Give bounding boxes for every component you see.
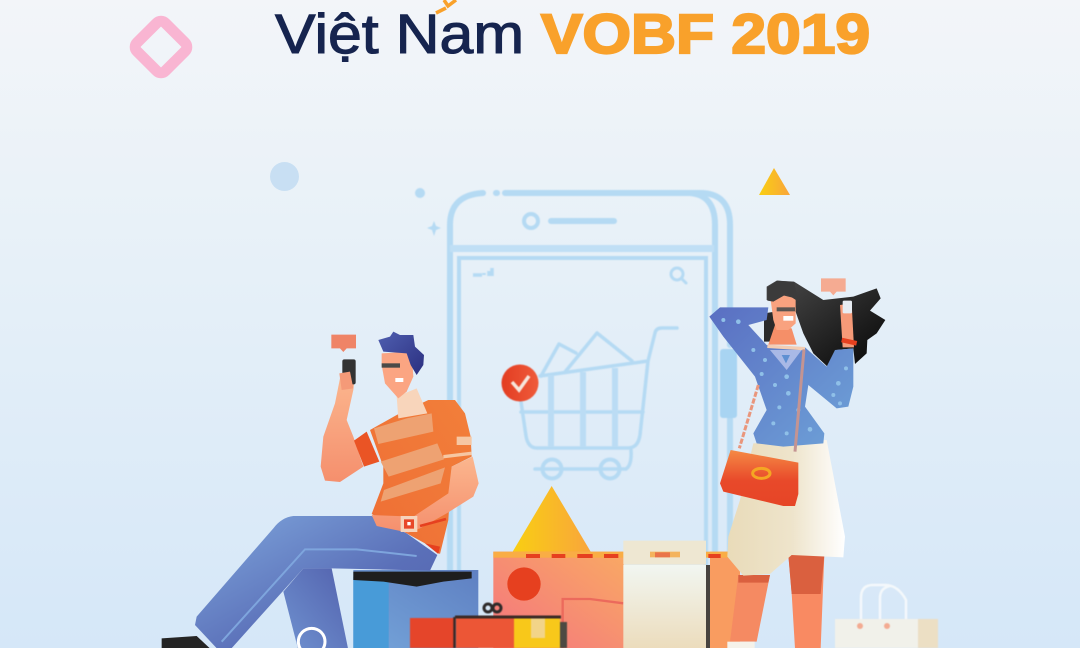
face — [771, 295, 796, 330]
legs — [727, 555, 824, 648]
face — [382, 352, 413, 398]
hand — [339, 372, 353, 390]
shopping bag — [835, 585, 938, 648]
sparkles — [415, 188, 441, 236]
raised arm — [321, 375, 363, 482]
blue blouse — [709, 307, 853, 447]
cream package — [623, 541, 710, 648]
phone body — [450, 193, 715, 580]
shirt sleeve overlap — [354, 432, 379, 467]
shirt — [370, 400, 472, 554]
phone back edge — [690, 193, 730, 560]
decorative diamond — [133, 19, 189, 75]
red circle — [507, 567, 541, 601]
orange box — [493, 552, 624, 648]
fringe — [767, 281, 798, 302]
decorative circle — [270, 162, 299, 191]
eyes and smile — [382, 363, 403, 382]
lower leg — [283, 568, 348, 648]
wrist watch — [401, 516, 417, 532]
ribbon bow — [484, 604, 501, 612]
title text: Việt Nam: Việt Nam — [275, 2, 524, 65]
chat tag — [331, 335, 356, 352]
collar — [767, 346, 805, 349]
stool — [353, 570, 478, 648]
speaker and camera — [524, 214, 614, 228]
phone header divider — [450, 245, 714, 252]
bracelet — [842, 340, 857, 343]
shoe — [162, 636, 212, 648]
boxes behind — [493, 486, 740, 648]
front gift box — [410, 604, 567, 648]
phone screen frame — [459, 258, 706, 580]
title text: VOBF 2019: VOBF 2019 — [541, 2, 870, 65]
neck — [768, 325, 797, 345]
raised hand — [840, 303, 854, 347]
phone illustration — [415, 188, 737, 580]
hair back — [767, 281, 885, 369]
side button — [720, 349, 737, 418]
title accent — [436, 0, 456, 13]
handbag — [720, 450, 798, 506]
hair — [378, 332, 424, 375]
check badge — [502, 364, 538, 402]
belt strap — [420, 519, 446, 526]
phone in hand — [843, 301, 852, 313]
thigh — [195, 516, 437, 648]
jeans seam — [222, 549, 417, 642]
phone in hand — [342, 359, 356, 384]
bag strap — [739, 349, 804, 452]
signal icon — [473, 268, 492, 276]
woman standing — [709, 278, 885, 648]
other arm — [372, 457, 479, 533]
blouse dots — [721, 318, 848, 435]
decorative triangle — [759, 168, 790, 195]
search icon — [671, 268, 686, 283]
orange box side — [706, 552, 740, 648]
glasses and smile — [777, 307, 795, 321]
skirt — [727, 440, 845, 576]
watch ring — [298, 628, 325, 648]
neck — [397, 388, 427, 418]
necklace — [770, 350, 802, 370]
chat tag — [821, 278, 846, 295]
yellow triangle — [512, 486, 592, 553]
shopping cart — [520, 328, 677, 478]
title — [275, 0, 870, 65]
man sitting — [162, 332, 479, 648]
